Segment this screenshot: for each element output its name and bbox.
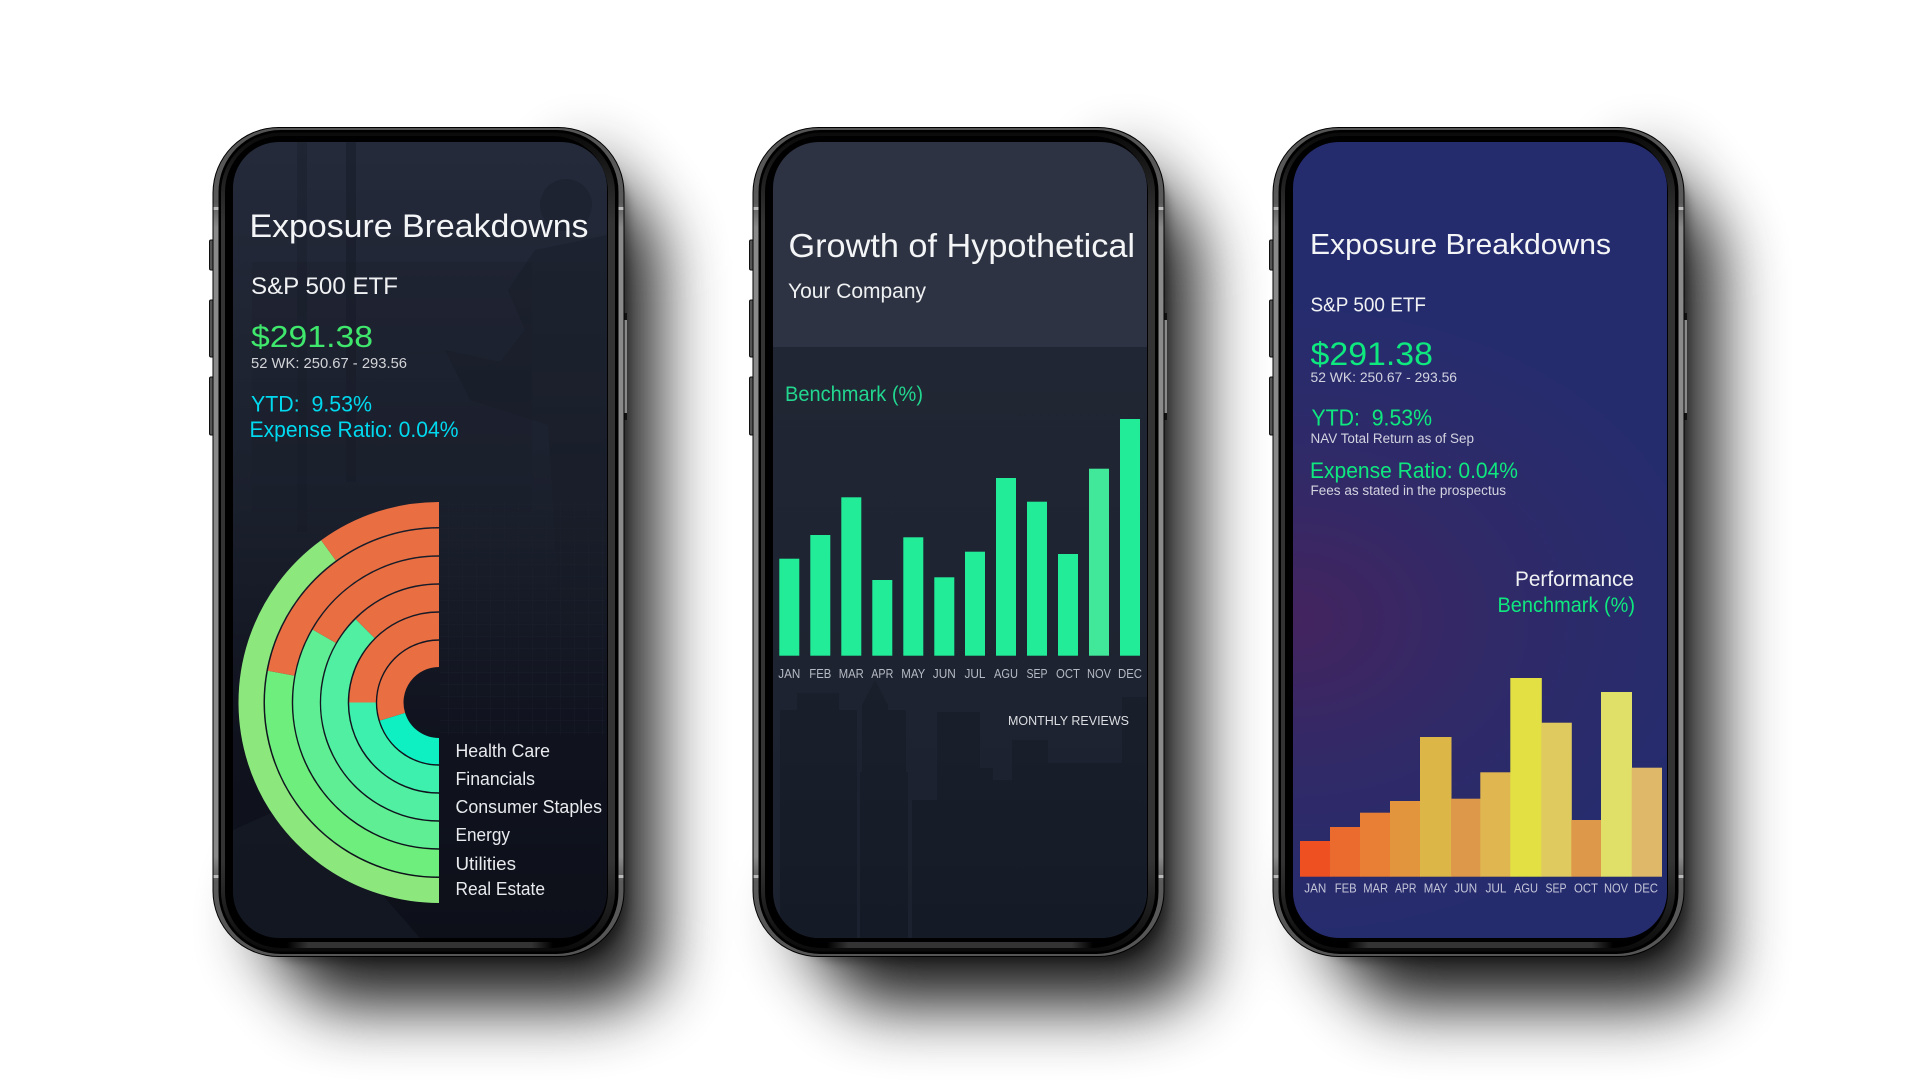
- month labels: MAY: [1424, 882, 1448, 896]
- screen background: [1293, 142, 1667, 938]
- price: $291.38: [1310, 336, 1433, 372]
- expense ratio: Expense Ratio: 0.04%: [250, 417, 458, 442]
- title: Growth of Hypothetical: [788, 227, 1135, 264]
- phone frame: [210, 127, 627, 957]
- month labels: MAY: [901, 667, 926, 681]
- title: Exposure Breakdowns: [1310, 229, 1611, 261]
- month labels: AGU: [1514, 882, 1538, 896]
- subtitle: Your Company: [788, 280, 926, 303]
- month labels: NOV: [1087, 667, 1112, 681]
- month labels: JUL: [1486, 882, 1507, 896]
- subtitle: S&P 500 ETF: [251, 273, 398, 300]
- chart legend: Financials: [456, 769, 535, 789]
- ytd note: NAV Total Return as of Sep: [1310, 431, 1474, 446]
- ytd: YTD: 9.53%: [251, 392, 372, 416]
- ytd: YTD: 9.53%: [1312, 404, 1432, 430]
- chart legend: Energy: [456, 825, 510, 845]
- month labels: NOV: [1604, 882, 1629, 896]
- month labels: JUL: [964, 667, 986, 681]
- chart legend: Health Care: [456, 741, 550, 761]
- month labels: JAN: [1304, 882, 1326, 896]
- 52 week range: 52 WK: 250.67 - 293.56: [1310, 369, 1457, 385]
- month labels: JUN: [1454, 882, 1477, 896]
- monthly reviews caption: MONTHLY REVIEWS: [1008, 713, 1129, 728]
- month labels: SEP: [1026, 667, 1048, 681]
- month labels: SEP: [1546, 882, 1566, 896]
- phone frame: [750, 127, 1167, 957]
- phone 1: exposure breakdowns, dark photo: [210, 127, 627, 957]
- month labels: DEC: [1118, 667, 1142, 681]
- month labels: FEB: [1335, 882, 1357, 896]
- chart label: Benchmark (%): [785, 383, 923, 406]
- benchmark label: Benchmark (%): [1498, 594, 1635, 617]
- month labels: FEB: [809, 667, 831, 681]
- phone 2: growth of hypothetical: [750, 127, 1167, 957]
- chart legend: Real Estate: [456, 879, 545, 899]
- month labels: MAR: [1363, 882, 1388, 896]
- chart legend: [456, 741, 602, 899]
- price: $291.38: [251, 319, 373, 354]
- bar chart: [1300, 678, 1662, 877]
- expense note: Fees as stated in the prospectus: [1310, 483, 1506, 498]
- phone frame: [1270, 127, 1687, 957]
- phone 3: exposure breakdowns, purple gradient: [1270, 127, 1687, 957]
- month labels: JUN: [933, 667, 956, 681]
- month labels: APR: [871, 667, 893, 681]
- month labels: [778, 667, 1142, 681]
- expense ratio: Expense Ratio: 0.04%: [1310, 458, 1518, 483]
- screen background with photo silhouettes: [233, 142, 607, 938]
- chart legend: Utilities: [456, 854, 516, 874]
- title: Exposure Breakdowns: [250, 208, 588, 244]
- month labels: [1304, 882, 1658, 896]
- radial bar chart: [251, 514, 439, 890]
- month labels: MAR: [839, 667, 864, 681]
- 52 week range: 52 WK: 250.67 - 293.56: [251, 356, 407, 372]
- performance label: Performance: [1515, 568, 1634, 591]
- month labels: OCT: [1056, 667, 1080, 681]
- month labels: DEC: [1634, 882, 1658, 896]
- month labels: APR: [1395, 882, 1416, 896]
- month labels: OCT: [1574, 882, 1598, 896]
- drop shadows: [243, 150, 1717, 1005]
- chart legend: Consumer Staples: [456, 797, 602, 817]
- month labels: AGU: [994, 667, 1018, 681]
- bar chart: [779, 419, 1140, 656]
- subtitle: S&P 500 ETF: [1310, 294, 1426, 316]
- screen background with skyline: [773, 142, 1147, 938]
- month labels: JAN: [778, 667, 800, 681]
